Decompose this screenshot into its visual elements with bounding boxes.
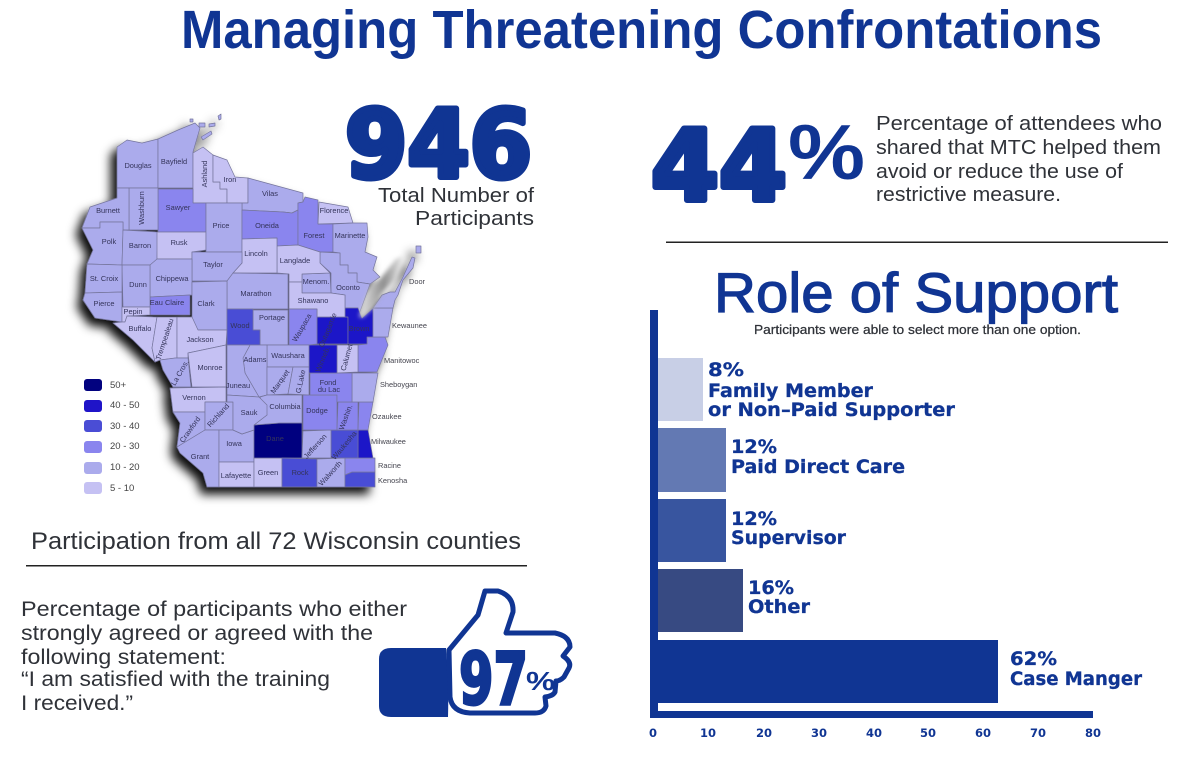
county labels: Columbia [269, 402, 301, 411]
county labels: Bayfield [161, 157, 187, 166]
stat: 44% [651, 108, 865, 224]
bar chart: role of support: or Non–Paid Supporter [708, 399, 956, 421]
map legend: 50+ [110, 380, 127, 391]
satisfaction statement: Percentage of participants who either [21, 598, 407, 621]
county labels: Ashland [200, 161, 209, 187]
bar chart: role of support: 10 [700, 726, 716, 740]
bar chart: role of support: Case Manger [1010, 668, 1143, 690]
county labels: Iowa [226, 439, 243, 448]
county labels: Dane [266, 434, 284, 443]
county labels: Buffalo [129, 324, 151, 333]
satisfaction statement: following statement: [21, 646, 226, 669]
county labels: Taylor [203, 260, 223, 269]
map legend: 10 - 20 [110, 462, 140, 473]
county labels: Waupaca [290, 311, 314, 343]
county labels: La Cros. [169, 358, 191, 387]
bar chart: role of support [649, 310, 1143, 740]
satisfaction statement: I received.” [21, 692, 133, 715]
county labels: Dodge [306, 406, 328, 415]
county labels: Waukesha [329, 429, 359, 462]
county labels: Trempealeau [154, 317, 176, 361]
outside county labels: Sheboygan [380, 380, 417, 389]
county labels: G.Lake [294, 369, 307, 394]
outside county labels: Racine [378, 461, 401, 470]
county labels: Monroe [197, 363, 223, 372]
bar chart: role of support: 30 [811, 726, 827, 740]
bar chart: role of support: Other [748, 596, 811, 618]
attendees statement [876, 112, 1162, 206]
county labels: Waushara [271, 351, 306, 360]
county labels: Oneida [255, 221, 280, 230]
lake bay [359, 256, 404, 317]
bar chart: role of support: 40 [866, 726, 882, 740]
map legend: 20 - 30 [110, 441, 140, 452]
county labels: Rusk [171, 238, 188, 247]
county labels: Clark [197, 299, 215, 308]
county labels: Pierce [94, 299, 114, 308]
outside county labels: Kewaunee [392, 321, 427, 330]
county labels: Portage [259, 313, 285, 322]
county labels: Langlade [280, 256, 310, 265]
map legend: 40 - 50 [110, 400, 140, 411]
satisfaction statement: “I am satisfied with the training [21, 668, 330, 691]
county labels: Winneb. [313, 345, 332, 373]
bar chart: role of support: 0 [649, 726, 657, 740]
county labels: Iron [224, 175, 236, 184]
county labels: Sauk [241, 408, 258, 417]
county labels: Walworth [317, 459, 344, 488]
stat: 946 participants: Participants [415, 208, 534, 230]
county labels: Shawano [298, 296, 328, 305]
outside county labels: Manitowoc [384, 356, 420, 365]
county labels: Fond [320, 378, 336, 387]
county labels: Washburn [137, 191, 146, 225]
county labels: Lafayette [221, 471, 251, 480]
bar chart: role of support: 62% [1010, 648, 1057, 670]
county labels: Richland [205, 402, 231, 429]
county labels: Jefferson [302, 432, 329, 461]
bar chart: role of support: 12% [731, 436, 777, 458]
county labels: Vilas [262, 189, 278, 198]
stat: 946 participants: 946 [345, 91, 532, 200]
bar chart: role of support: 70 [1030, 726, 1046, 740]
county labels: Dunn [129, 280, 147, 289]
title: Managing Threatening Confrontations [181, 0, 1102, 60]
map: Wisconsin counties [82, 114, 427, 488]
bar chart: role of support: 20 [756, 726, 772, 740]
county labels: Price [213, 221, 229, 230]
county labels: du Lac [318, 385, 340, 394]
county labels: Rock [292, 468, 309, 477]
county labels: Marinette [335, 231, 365, 240]
county labels: Pepin [124, 307, 142, 316]
county labels: Green [258, 468, 278, 477]
county labels: Crawford [178, 415, 202, 444]
icon: thumbs up 97%: 97 [459, 637, 528, 721]
outside county labels: Kenosha [378, 476, 408, 485]
satisfaction statement: strongly agreed or agreed with the [21, 622, 373, 645]
county labels [90, 157, 369, 488]
icon: thumbs up 97%: % [526, 666, 555, 696]
bar chart: role of support: 80 [1085, 726, 1101, 740]
county labels: Washin. [337, 403, 354, 431]
county labels: Outagamie [317, 312, 339, 349]
bar chart: role of support: 16% [748, 577, 794, 599]
county labels: Polk [102, 237, 116, 246]
stat: 946 participants: Total Number of [378, 185, 534, 207]
county labels: Sawyer [166, 203, 191, 212]
stat: 44%: % [788, 108, 865, 196]
map legend [84, 379, 140, 494]
county labels: Juneau [226, 381, 250, 390]
county labels: Wood [230, 321, 250, 330]
satisfaction statement [21, 598, 407, 715]
county labels: Brown [349, 324, 369, 333]
county labels: Forest [304, 231, 324, 240]
county labels: Oconto [336, 283, 360, 292]
chart note: Participants were able to select more than one option. [754, 323, 1081, 337]
county labels: Marquet [268, 368, 291, 395]
bar chart: role of support: 50 [920, 726, 936, 740]
county labels: Chippewa [156, 274, 189, 283]
attendees statement: restrictive measure. [876, 183, 1061, 206]
map legend: 30 - 40 [110, 421, 140, 432]
county labels: Barron [129, 241, 151, 250]
outside county labels: Door [409, 277, 426, 286]
outside county labels: Ozaukee [372, 412, 402, 421]
county labels: Eau Claire [150, 298, 184, 307]
outside county labels [371, 277, 427, 485]
map legend: 5 - 10 [110, 483, 134, 494]
caption: all counties: Participation from all 72 Wisconsin counties [31, 528, 521, 555]
attendees statement: avoid or reduce the use of [876, 160, 1123, 183]
county labels: Grant [191, 452, 209, 461]
attendees statement: shared that MTC helped them [876, 136, 1161, 159]
attendees statement: Percentage of attendees who [876, 112, 1162, 135]
icon: thumbs up 97% [379, 591, 570, 721]
county labels: Calumet [339, 343, 354, 372]
outside county labels: Milwaukee [371, 437, 406, 446]
county labels: Lincoln [244, 249, 268, 258]
county labels: Adams [243, 355, 267, 364]
bar chart: role of support: Family Member [708, 380, 874, 402]
bar chart: role of support: Paid Direct Care [731, 456, 905, 478]
bar chart: role of support: 12% [731, 508, 777, 530]
county labels: Menom. [303, 277, 329, 286]
county labels: St. Croix [90, 274, 118, 283]
county labels: Marathon [240, 289, 272, 298]
county labels: Douglas [124, 161, 152, 170]
bar chart: role of support: 60 [975, 726, 991, 740]
county labels: Vernon [182, 393, 206, 402]
county labels: Burnett [96, 206, 120, 215]
county labels: Jackson [186, 335, 214, 344]
heading: role of support: Role of Support [714, 261, 1118, 324]
bar chart: role of support: Supervisor [731, 527, 847, 549]
stat: 44%: 44 [651, 110, 787, 224]
county labels: Florence [320, 206, 348, 215]
bar chart: role of support: 8% [708, 359, 744, 381]
